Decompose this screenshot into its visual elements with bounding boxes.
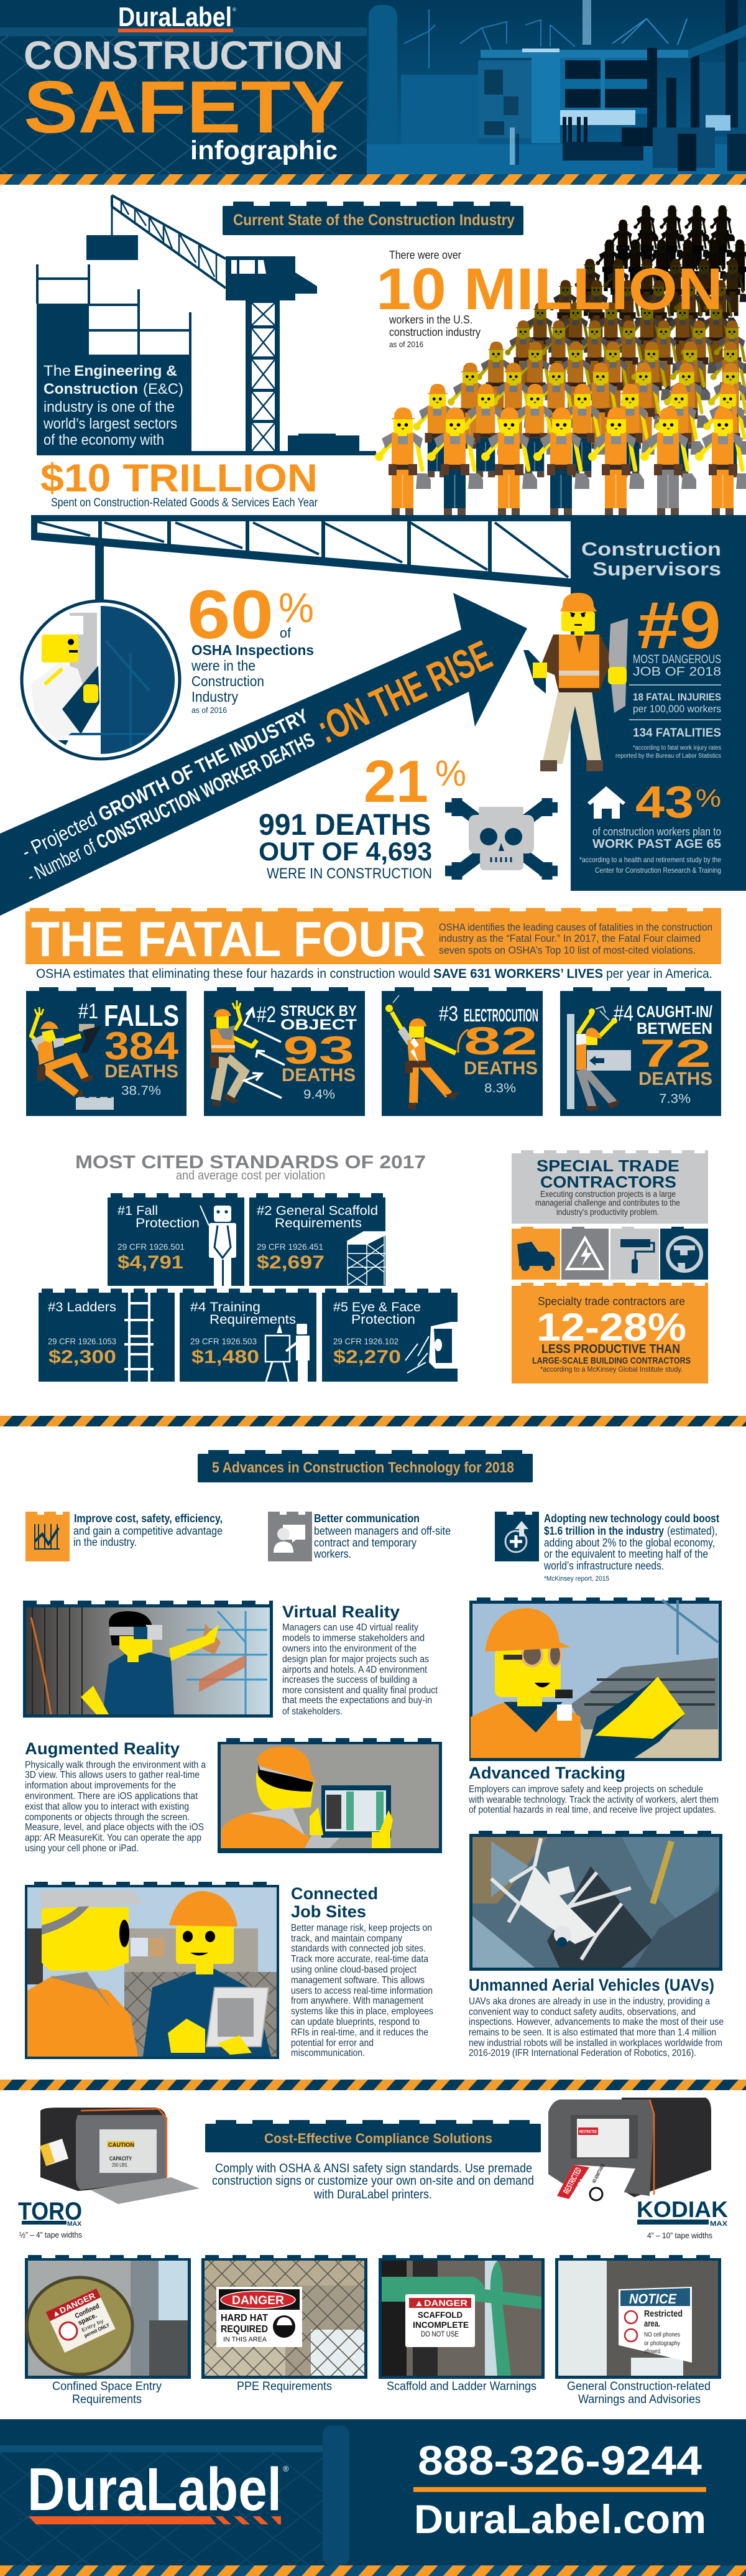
stat: 60%: were in the xyxy=(191,658,256,674)
printer: Toro Max: CAUTION xyxy=(108,2142,134,2148)
inspector circle illustration xyxy=(22,601,182,759)
text: connected job sites: from anywhere. With management xyxy=(291,1996,423,2006)
header photo: construction site xyxy=(367,0,746,174)
photo: notice sign: NOTICE xyxy=(629,2291,677,2307)
icon tile: paint roller xyxy=(610,1227,659,1280)
stat: 60%: of xyxy=(280,625,292,641)
stat: 10 million: workers in the U.S. xyxy=(389,314,472,326)
tile: eye & face xyxy=(322,1291,458,1382)
caption: Scaffold and Ladder Warnings xyxy=(387,2380,536,2393)
tile: fall protection: $4,791 xyxy=(117,1252,183,1273)
tile: eye & face: #5 Eye & Face xyxy=(333,1300,421,1314)
text: E&C industry: of the economy with xyxy=(44,432,164,449)
stat: 43% xyxy=(579,778,721,875)
section banner: compliance xyxy=(205,2122,541,2152)
image: UAV drone over site xyxy=(469,1833,722,1971)
text: comply: construction signs or customize your own on-site and on demand xyxy=(212,2174,534,2188)
text: connected job sites: potential for error and xyxy=(291,2038,374,2048)
panel: special trade contractors xyxy=(512,1152,708,1224)
stat: 60%: Industry xyxy=(191,689,238,705)
tile: scaffold: Requirements xyxy=(275,1216,362,1230)
card: caught-in/between: 72 xyxy=(640,1032,711,1076)
text: virtual reality: of stakeholders. xyxy=(282,1706,343,1717)
header banner xyxy=(0,0,746,174)
benefit: $1.6 trillion xyxy=(495,1512,719,1583)
icon tile: growth chart xyxy=(25,1513,70,1561)
text: connected job sites: track, and maintain company xyxy=(291,1933,402,1944)
fatal four banner: seven spots on OSHA’s Top 10 list of most-cited violations. xyxy=(439,944,696,956)
text: connected job sites: using online cloud-based project xyxy=(291,1965,417,1975)
text: osha estimate: OSHA estimates that eliminating these four hazards in construction would xyxy=(36,967,430,981)
tile: scaffold: 29 CFR 1926.451 xyxy=(257,1242,323,1252)
benefit: cost xyxy=(25,1512,223,1561)
card: falls: 384 xyxy=(104,1025,178,1068)
stat: 43%: of construction workers plan to xyxy=(592,825,721,838)
text: connected job sites: Connected xyxy=(291,1884,378,1903)
icon tile: concrete truck xyxy=(512,1227,560,1280)
stat: 21% deaths: % xyxy=(435,753,466,794)
stat: #9: JOB OF 2018 xyxy=(633,665,721,679)
text: E&C industry: world’s largest sectors xyxy=(43,416,177,432)
on the rise arrow: :ON THE RISE xyxy=(310,631,499,752)
section banner: current state: Current State of the Construction Industry xyxy=(233,212,515,229)
icon: skull and crossbones xyxy=(445,798,558,880)
photo: confined space sign: Confined xyxy=(74,2302,101,2320)
section banner: current state xyxy=(223,204,523,235)
card: electrocution: 8.3% xyxy=(484,1081,516,1095)
text: augmented reality: Augmented Reality xyxy=(25,1739,180,1758)
card: struck by object: OBJECT xyxy=(280,1016,357,1033)
photo: scaffold sign: INCOMPLETE xyxy=(413,2320,469,2330)
fatal four banner: industry as the “Fatal Four.” In 2017, the Fatal Four claimed xyxy=(439,932,701,944)
text: advanced tracking: Advanced Tracking xyxy=(469,1764,625,1782)
tile: fall protection: #1 Fall xyxy=(117,1204,158,1218)
photo: hard hat sign: IN THIS AREA xyxy=(223,2336,267,2343)
stat: $10 trillion: Spent on Construction-Related Goods & Services Each Year xyxy=(51,496,318,509)
benefit: cost: Improve cost, safety, efficiency, xyxy=(74,1512,223,1525)
logo: ® xyxy=(283,2464,289,2473)
text: connected job sites: can update blueprints, respond to xyxy=(291,2017,420,2027)
text: augmented reality: 3D view. This allows users to gather real-time xyxy=(25,1770,200,1780)
photo: hard hat sign xyxy=(201,2257,367,2379)
photo: scaffold sign: DO NOT USE xyxy=(421,2330,459,2338)
photo: scaffold sign: ▲DANGER xyxy=(414,2298,467,2308)
card: caught-in/between xyxy=(560,989,721,1116)
crane illustration xyxy=(37,195,376,455)
logo: Toro Max: ½” – 4” tape widths xyxy=(19,2230,82,2239)
stat: 43%: *according to a health and retirement study by the xyxy=(579,855,721,864)
heading xyxy=(581,538,721,580)
text: advanced tracking xyxy=(468,1764,719,1815)
text: E&C industry: Construction xyxy=(44,381,138,398)
text: comply xyxy=(212,2162,534,2202)
tile: training xyxy=(180,1291,316,1382)
printer: Kodiak Max: NO ADMITTANCE xyxy=(591,2162,606,2184)
tile: eye & face: Protection xyxy=(351,1313,415,1327)
heading: Construction xyxy=(581,538,721,560)
photo: hard hat sign: REQUIRED xyxy=(221,2324,268,2335)
fatal four banner: THE FATAL FOUR xyxy=(31,911,426,967)
stat: 43%: WORK PAST AGE 65 xyxy=(592,837,721,851)
photo: notice sign: Restricted xyxy=(644,2309,683,2319)
card: caught-in/between: CAUGHT-IN/ xyxy=(637,1002,712,1021)
text: UAVs: 2016-2019 (IFR International Federation of Robotics, 2016). xyxy=(469,2048,696,2058)
stat: #9 xyxy=(615,587,721,760)
panel: specialty trade stat: 12-28% xyxy=(536,1306,686,1349)
illustration: caught worker xyxy=(567,1007,631,1110)
benefit: communication xyxy=(268,1512,451,1561)
contact xyxy=(413,2437,706,2542)
fatal four banner xyxy=(25,909,721,967)
illustration: supervisor xyxy=(523,593,628,771)
text: E&C industry: industry is one of the xyxy=(44,399,175,416)
text: augmented reality: exist that allow you to interact with existing xyxy=(25,1802,189,1812)
stat: 10 million: as of 2016 xyxy=(389,340,423,349)
stat: 60%: 60 xyxy=(187,577,274,653)
printer: Toro Max: CAPACITY xyxy=(109,2155,132,2162)
title: infographic xyxy=(190,136,338,165)
text: virtual reality: models to immerse stakeholders and xyxy=(282,1633,425,1644)
stat: 10 million xyxy=(376,249,723,349)
tile: eye & face: $2,270 xyxy=(333,1347,401,1367)
text: E&C industry xyxy=(43,363,183,449)
stat: #9: per 100,000 workers xyxy=(633,703,721,715)
stat: #9: 18 FATAL INJURIES xyxy=(633,691,721,703)
panel: special trade contractors: managerial challenge and contributes to the xyxy=(535,1198,680,1207)
panel: specialty trade stat: LARGE-SCALE BUILDING CONTRACTORS xyxy=(532,1355,691,1366)
text: comply: with DuraLabel printers. xyxy=(313,2188,432,2202)
text: augmented reality: environment. There are iOS applications that xyxy=(25,1791,198,1802)
text: connected job sites: Better manage risk, keep projects on xyxy=(291,1923,432,1933)
illustration: falling worker xyxy=(31,1007,114,1110)
text: connected job sites: management software. This allows xyxy=(291,1975,425,1986)
caption: Confined Space Entry xyxy=(52,2380,162,2393)
text: virtual reality: increases the success of building a xyxy=(282,1675,417,1685)
card: caught-in/between: #4 xyxy=(614,1000,633,1026)
text: connected job sites: systems like this in place, employees xyxy=(291,2006,433,2017)
photo: notice sign: or photography xyxy=(644,2340,680,2347)
card: struck by object: DEATHS xyxy=(282,1065,356,1086)
logo: Toro Max xyxy=(18,2198,82,2239)
section banner: 5 advances: 5 Advances in Construction Technology for 2018 xyxy=(212,1459,514,1476)
crowd of workers xyxy=(375,205,746,515)
tile: fall protection: 29 CFR 1926.501 xyxy=(117,1242,185,1252)
tile: ladders: 29 CFR 1926.1053 xyxy=(48,1336,116,1346)
illustration: electrocuted worker xyxy=(385,995,468,1110)
heading: Supervisors xyxy=(592,558,721,580)
stat: #9: 134 FATALITIES xyxy=(633,727,721,740)
printer: Kodiak Max: RESTRICTED xyxy=(579,2130,597,2134)
panel: special trade contractors: Executing construction projects is a large xyxy=(540,1189,676,1199)
text: osha estimate xyxy=(36,967,712,981)
text: virtual reality: design plan for major projects such as xyxy=(282,1654,429,1665)
heading: most cited standards: MOST CITED STANDARDS OF 2017 xyxy=(75,1152,426,1173)
stat: 21% deaths: 21 xyxy=(364,748,428,815)
printer: Toro Max: 250 LBS. xyxy=(112,2162,128,2168)
illustration: struck worker xyxy=(210,1000,285,1106)
text: augmented reality: Measure, level, and place objects with the iOS xyxy=(25,1822,204,1833)
text: osha estimate: SAVE 631 WORKERS’ LIVES xyxy=(433,967,603,981)
card: struck by object xyxy=(204,989,365,1116)
title: CONSTRUCTION xyxy=(24,33,343,78)
panel: special trade contractors: industry’s productivity problem. xyxy=(556,1207,659,1217)
icon tile: plus and arrow xyxy=(495,1513,539,1561)
logo: Toro Max: TORO xyxy=(18,2198,82,2225)
logo: Toro Max: MAX xyxy=(67,2221,81,2228)
text: UAVs: convenient way to conduct safety audits, observations, and xyxy=(469,2007,696,2017)
icon: house xyxy=(587,786,625,819)
title xyxy=(24,33,345,165)
text: connected job sites: Job Sites xyxy=(291,1902,366,1921)
tile: fall protection: Protection xyxy=(136,1216,200,1230)
stat: 21% deaths: 991 DEATHS xyxy=(259,809,431,842)
stat: $10 trillion: $10 TRILLION xyxy=(40,457,318,500)
panel: special trade contractors: SPECIAL TRADE xyxy=(536,1156,679,1175)
logo: ® xyxy=(233,7,236,12)
panel: specialty trade stat: LESS PRODUCTIVE THAN xyxy=(541,1342,680,1356)
tile: ladders: $2,300 xyxy=(48,1347,116,1367)
logo: DuraLabel xyxy=(118,2,232,32)
tile: training: Requirements xyxy=(210,1313,296,1327)
card: falls: #1 xyxy=(78,1000,98,1023)
tile: training: $1,480 xyxy=(191,1347,259,1367)
card: caught-in/between: 7.3% xyxy=(659,1092,691,1106)
icon: trainer at easel xyxy=(265,1324,310,1382)
text: connected job sites: users to access real-time information xyxy=(291,1986,433,1996)
photo: confined space sign: ▲DANGER xyxy=(50,2290,97,2319)
card: electrocution: #3 xyxy=(439,1002,458,1026)
caption: PPE Requirements xyxy=(237,2380,332,2393)
stat: #9: *according to fatal work injury rates xyxy=(633,745,721,751)
icon: scaffold xyxy=(348,1232,385,1285)
card: electrocution: 82 xyxy=(464,1020,538,1063)
benefit: communication: between managers and off-site xyxy=(314,1525,451,1537)
contact: 888-326-9244 xyxy=(418,2437,702,2483)
text: E&C industry: (E&C) xyxy=(143,381,183,398)
logo: Kodiak Max: 4” – 10” tape widths xyxy=(647,2231,712,2240)
benefit: $1.6 trillion: world’s infrastructure needs. xyxy=(543,1560,664,1572)
tile: ladders: #3 Ladders xyxy=(48,1300,116,1314)
stat: #9: reported by the Bureau of Labor Statistics xyxy=(615,753,721,760)
image: virtual reality scene xyxy=(23,1602,273,1718)
photo: confined space sign xyxy=(25,2257,191,2379)
tile: fall protection xyxy=(108,1196,244,1286)
image: advanced tracking scene xyxy=(469,1599,722,1761)
footer xyxy=(0,2419,746,2576)
text: connected job sites: standards with connected job sites. xyxy=(291,1943,426,1954)
benefit: $1.6 trillion: Adopting new technology could boost xyxy=(544,1512,719,1525)
section banner: 5 advances xyxy=(198,1452,533,1482)
stat: 43%: 43 xyxy=(635,778,694,827)
text: UAVs xyxy=(469,1976,724,2058)
photo: notice sign: allowed. xyxy=(644,2348,661,2355)
contact: DuraLabel.com xyxy=(414,2496,706,2542)
text: augmented reality xyxy=(25,1739,206,1854)
on the rise arrow: - Number of CONSTRUCTION WORKER DEATHS xyxy=(23,728,318,887)
photo: notice sign: NO cell phones xyxy=(644,2332,680,2338)
text: UAVs: Unmanned Aerial Vehicles (UAVs) xyxy=(469,1976,714,1994)
text: virtual reality xyxy=(282,1602,438,1717)
stat: 60%: Construction xyxy=(191,673,264,689)
logo: Kodiak Max: KODIAK xyxy=(637,2197,728,2222)
panel: construction supervisors xyxy=(523,515,746,891)
card: caught-in/between: BETWEEN xyxy=(637,1019,712,1038)
text: augmented reality: app: AR MeasureKit. You can operate the app xyxy=(25,1833,201,1843)
caption xyxy=(52,2380,162,2406)
text: connected job sites: miscommunication. xyxy=(291,2048,365,2058)
stat: 60%: as of 2016 xyxy=(191,705,227,715)
card: falls: DEATHS xyxy=(104,1061,178,1082)
card: electrocution: DEATHS xyxy=(464,1058,538,1079)
fatal four banner: OSHA identifies the leading causes of fatalities in the construction xyxy=(439,921,712,933)
tile: training: #4 Training xyxy=(190,1300,260,1314)
benefit: $1.6 trillion: (estimated), xyxy=(667,1525,717,1537)
text: connected job sites: Track more accurate, real-time data xyxy=(291,1954,428,1965)
card: falls xyxy=(26,989,186,1116)
text: E&C industry: Engineering & xyxy=(74,363,177,379)
image: augmented reality scene xyxy=(218,1740,442,1853)
title: SAFETY xyxy=(24,66,345,149)
card: struck by object: #2 xyxy=(257,1002,276,1027)
panel: specialty trade stat xyxy=(512,1284,708,1383)
panel: specialty trade stat: *according to a McKinsey Global Institute study. xyxy=(540,1365,683,1374)
on the rise arrow: - Projected GROWTH OF THE INDUSTRY xyxy=(18,704,312,863)
photo: scaffold sign xyxy=(379,2257,545,2379)
section banner: compliance: Cost-Effective Compliance Solutions xyxy=(264,2131,492,2146)
logo: Kodiak Max: MAX xyxy=(710,2220,728,2228)
icon tile: electrical hazard xyxy=(561,1227,609,1280)
stat: 43%: Center for Construction Research & Training xyxy=(595,866,721,875)
photo: confined space sign: space. xyxy=(77,2312,98,2327)
caption: General Construction-related xyxy=(567,2380,711,2393)
photo: notice sign xyxy=(555,2257,721,2379)
card: caught-in/between: DEATHS xyxy=(638,1069,712,1089)
icon tile: plumbing xyxy=(660,1227,708,1280)
tile: scaffold: #2 General Scaffold xyxy=(257,1204,378,1218)
text: connected job sites xyxy=(291,1884,433,2058)
text: virtual reality: that meets the expectations and buy-in xyxy=(282,1695,432,1706)
card: electrocution xyxy=(382,989,543,1116)
printer: Toro Max xyxy=(40,2108,200,2204)
card: struck by object: 93 xyxy=(283,1029,354,1072)
text: virtual reality: airports and hotels. A 4D environment xyxy=(282,1665,428,1675)
tile: scaffold: $2,697 xyxy=(257,1252,325,1273)
stat: 43%: % xyxy=(696,785,721,812)
large crane boom xyxy=(31,515,571,602)
text: virtual reality: Managers can use 4D virtual reality xyxy=(282,1622,418,1633)
on the rise arrow xyxy=(0,593,527,916)
stat: #9: MOST DANGEROUS xyxy=(633,653,721,666)
caption: Requirements xyxy=(72,2393,142,2406)
panel: special trade contractors: CONTRACTORS xyxy=(540,1173,676,1191)
stat: 21% deaths: WERE IN CONSTRUCTION xyxy=(267,865,432,882)
stat: 60% xyxy=(187,577,314,715)
icon tile: speech person xyxy=(268,1513,312,1561)
printer: Kodiak Max xyxy=(548,2098,711,2210)
image: connected job sites scene xyxy=(25,1884,279,2059)
card: falls: 38.7% xyxy=(121,1084,161,1098)
text: virtual reality: Virtual Reality xyxy=(282,1602,400,1621)
printer: Kodiak Max: RESTRICTED xyxy=(561,2165,583,2195)
photo: confined space sign: Entry by xyxy=(81,2318,104,2333)
text: UAVs: UAVs aka drones are already in use in the industry, providing a xyxy=(469,1996,710,2007)
tile: eye & face: 29 CFR 1926.102 xyxy=(333,1336,398,1346)
stat: 21% deaths: OUT OF 4,693 xyxy=(259,837,432,866)
stat: 60%: OSHA Inspections xyxy=(191,642,314,658)
benefit: cost: and gain a competitive advantage xyxy=(73,1525,223,1537)
icon: harness figure xyxy=(200,1206,236,1286)
photo: hard hat sign: DANGER xyxy=(232,2294,284,2307)
text: connected job sites: RFIs in real-time, and it reduces the xyxy=(291,2027,428,2038)
logo: DuraLabel xyxy=(27,2455,282,2523)
stat: 21% deaths xyxy=(259,748,466,882)
icon: ladder xyxy=(124,1293,154,1382)
photo: scaffold sign: SCAFFOLD xyxy=(418,2310,463,2320)
benefit: $1.6 trillion: $1.6 trillion in the industry xyxy=(544,1525,664,1537)
heading: most cited standards xyxy=(75,1152,426,1183)
text: osha estimate: per year in America. xyxy=(606,967,712,981)
stat: #9: #9 xyxy=(637,587,721,663)
icon: face shield xyxy=(405,1322,458,1373)
benefit: communication: contract and temporary xyxy=(314,1537,417,1549)
stat: 10 million: There were over xyxy=(389,249,461,261)
benefit: communication: Better communication xyxy=(314,1512,420,1525)
tile: ladders xyxy=(39,1291,175,1382)
text: augmented reality: information about improvements for the xyxy=(25,1780,176,1791)
printer: Kodiak Max: AREA xyxy=(571,2177,588,2197)
text: augmented reality: using your cell phone or iPad. xyxy=(25,1843,139,1854)
card: struck by object: 9.4% xyxy=(303,1087,335,1102)
text: augmented reality: Physically walk through the environment with a xyxy=(25,1760,206,1770)
text: augmented reality: components or objects through the screen. xyxy=(25,1812,190,1823)
card: falls: FALLS xyxy=(104,1000,179,1033)
benefit: cost: in the industry. xyxy=(73,1536,137,1548)
photo: hard hat sign: HARD HAT xyxy=(221,2313,268,2323)
text: virtual reality: more consistent and quality final product xyxy=(282,1685,438,1696)
text: E&C industry: The xyxy=(44,363,71,379)
tile: scaffold xyxy=(249,1196,385,1286)
text: comply: Comply with OSHA & ANSI safety sign standards. Use premade xyxy=(215,2162,532,2175)
benefit: communication: workers. xyxy=(313,1548,351,1560)
caption xyxy=(567,2380,711,2406)
stat: 60%: % xyxy=(279,585,314,631)
photo: notice sign: area. xyxy=(644,2318,660,2329)
benefit: $1.6 trillion: adding about 2% to the global economy, xyxy=(544,1537,715,1549)
text: virtual reality: owners into the environment of the xyxy=(282,1644,417,1654)
caption: Warnings and Advisories xyxy=(578,2393,701,2406)
benefit: $1.6 trillion: or the equivalent to meeting half of the xyxy=(544,1548,708,1560)
text: advanced tracking: Employers can improve safety and keep projects on schedule xyxy=(469,1784,703,1795)
tile: training: 29 CFR 1926.503 xyxy=(190,1336,257,1346)
card: struck by object: STRUCK BY xyxy=(280,1003,357,1020)
benefit: $1.6 trillion: *McKinsey report, 2015 xyxy=(544,1575,609,1583)
heading: most cited standards: and average cost per violation xyxy=(176,1169,325,1183)
logo: Kodiak Max xyxy=(637,2197,728,2240)
panel: specialty trade stat: Specialty trade contractors are xyxy=(538,1295,685,1308)
card: electrocution: ELECTROCUTION xyxy=(464,1006,538,1026)
stat: 10 million: 10 MILLION xyxy=(376,256,723,322)
stat: 10 million: construction industry xyxy=(389,326,481,338)
photo: confined space sign: permit ONLY xyxy=(83,2322,111,2339)
